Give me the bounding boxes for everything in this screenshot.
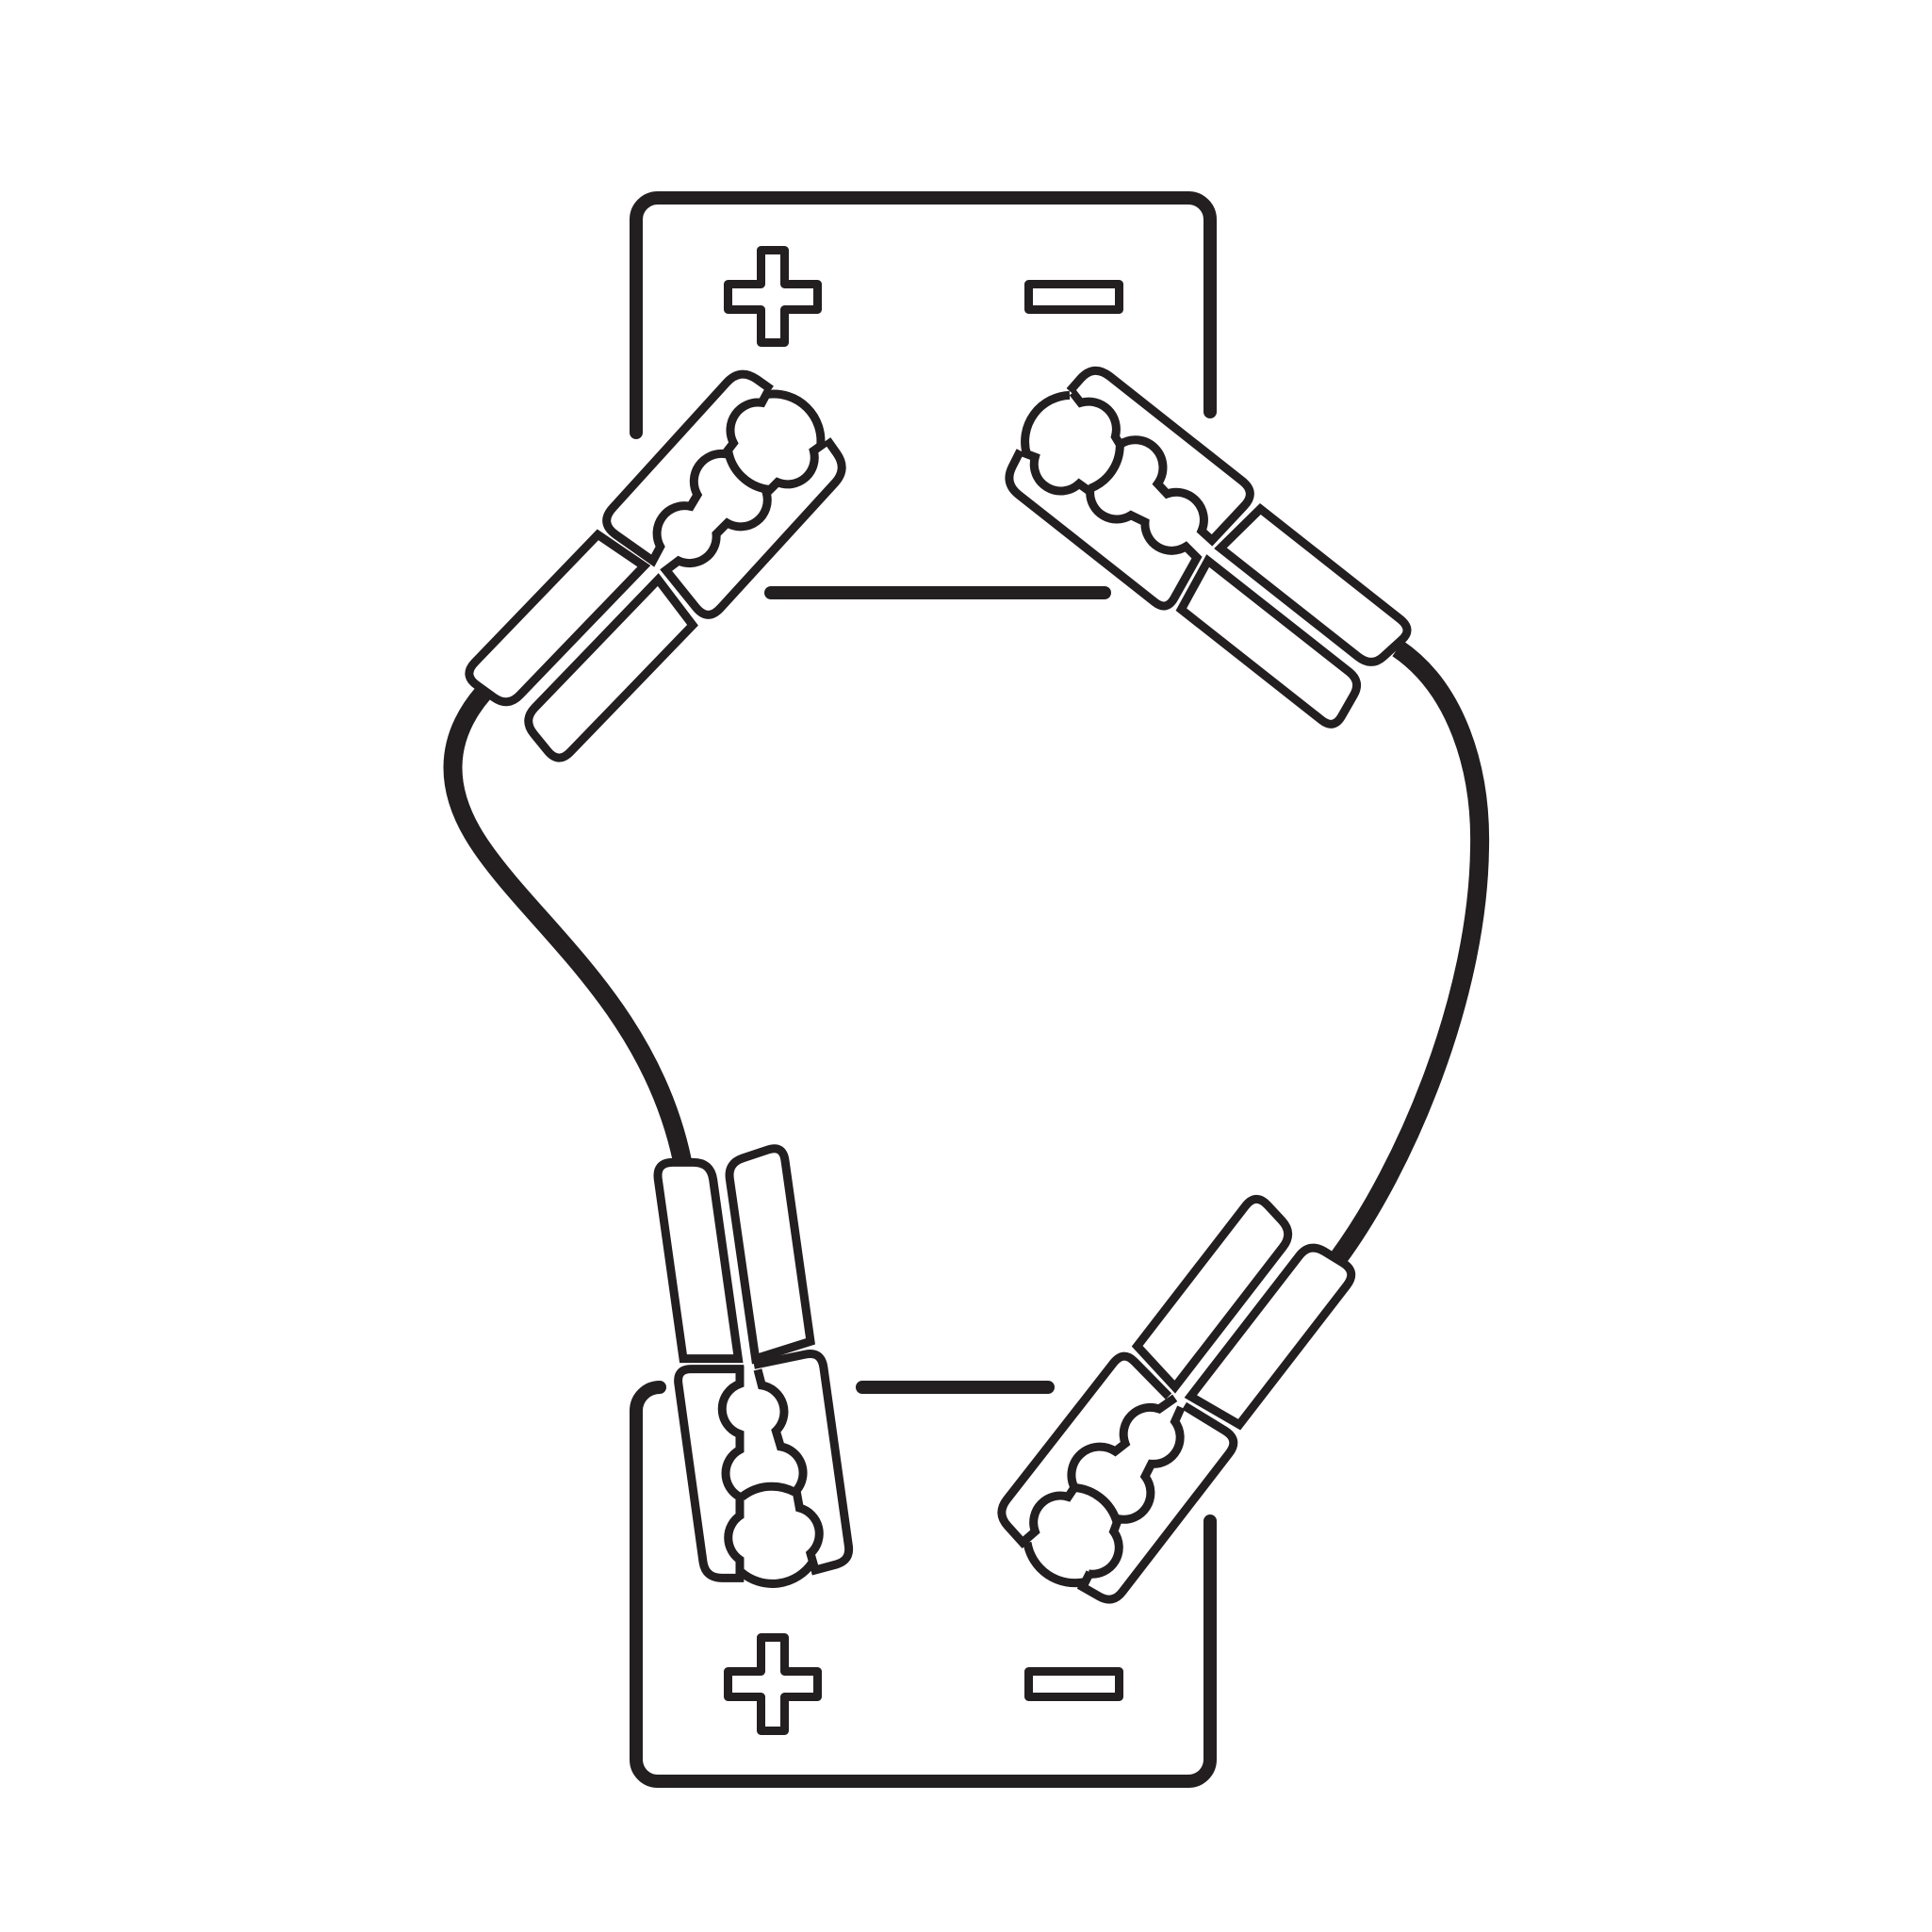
clamp handle B: [529, 580, 693, 758]
battery outline: bottom: [636, 1387, 1210, 1781]
clamp ball: [1027, 1487, 1117, 1583]
clamp ball: [729, 394, 821, 489]
bottom battery: [636, 1387, 1210, 1781]
clamp: bottom left: [658, 1149, 849, 1583]
minus terminal symbol: bottom: [1029, 1672, 1120, 1696]
clamp: bottom right: [1002, 1199, 1351, 1599]
clamp right jaw: [1079, 1406, 1234, 1599]
clamp handle B: [1181, 561, 1357, 724]
minus terminal symbol: top: [1029, 285, 1120, 309]
clamp right jaw: [754, 1353, 849, 1570]
top bar of battery: [771, 586, 1105, 599]
cable: left: [452, 693, 682, 1161]
top battery: [636, 198, 1210, 593]
clamp handle B: [729, 1149, 810, 1359]
clamp handle B: [1190, 1248, 1351, 1425]
clamp ball: [742, 1486, 812, 1583]
bottom bar of battery: [862, 1381, 1048, 1394]
clamp lower jaw: [1009, 450, 1197, 606]
clamp ball: [1025, 395, 1120, 488]
clamp handle A: [658, 1162, 738, 1359]
clamp: top right: [1009, 370, 1407, 724]
clamp handle A: [1220, 509, 1407, 662]
clamp upper jaw: [1070, 370, 1250, 540]
battery outline: top: [636, 198, 1210, 433]
clamp left jaw: [1002, 1356, 1175, 1543]
clamp left jaw: [679, 1367, 744, 1578]
clamp upper jaw: [607, 374, 771, 561]
clamp handle A: [1138, 1199, 1288, 1387]
clamp handle A: [469, 534, 644, 702]
clamp lower jaw: [666, 440, 842, 614]
plus terminal symbol: bottom: [728, 1638, 818, 1730]
clamp: top left: [469, 374, 842, 758]
plus terminal symbol: top: [728, 251, 818, 343]
cable: right: [1338, 648, 1480, 1258]
